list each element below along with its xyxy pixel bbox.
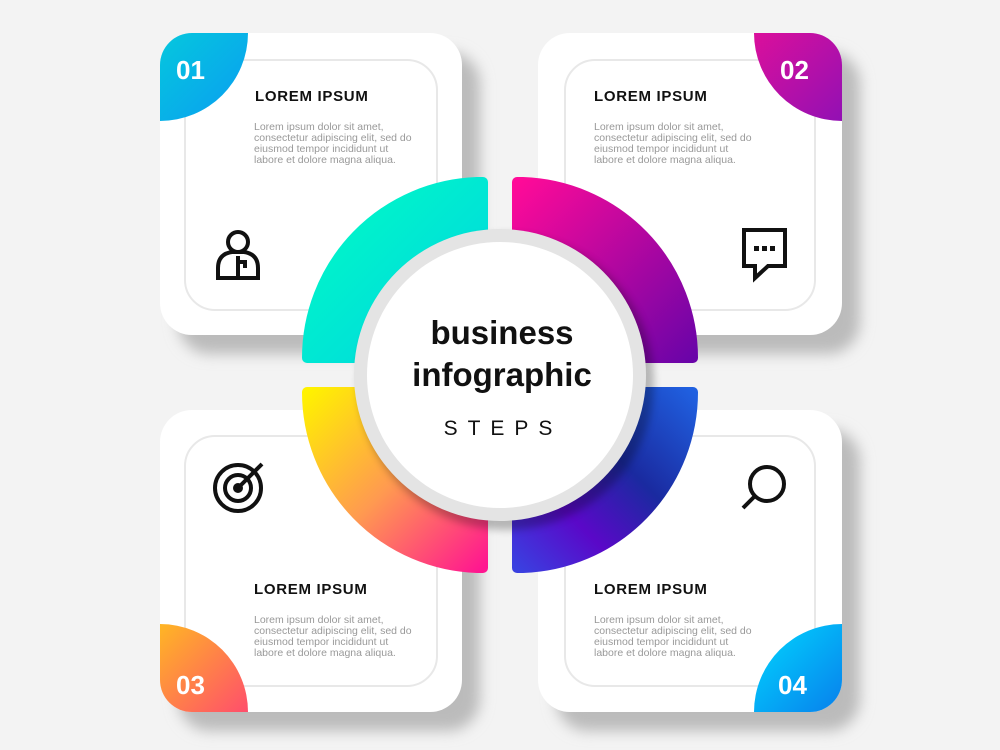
heading 04: LOREM IPSUM — [594, 581, 708, 598]
subtitle: STEPS — [444, 417, 562, 440]
heading 03: LOREM IPSUM — [254, 581, 368, 598]
body 03: consectetur adipiscing elit, sed do — [254, 625, 412, 637]
body 04: consectetur adipiscing elit, sed do — [594, 625, 752, 637]
body 04: labore et dolore magna aliqua. — [594, 647, 736, 659]
badge 02: 02 — [780, 55, 809, 85]
card 01 — [160, 33, 487, 361]
body 01: eiusmod tempor incididunt ut — [254, 143, 388, 155]
badge 01: 01 — [176, 55, 205, 85]
body 03: eiusmod tempor incididunt ut — [254, 636, 388, 648]
body 02: eiusmod tempor incididunt ut — [594, 143, 728, 155]
center circle: infographic — [412, 356, 592, 393]
icon: person — [218, 232, 258, 278]
card 02 — [538, 33, 867, 361]
badge 01 — [160, 33, 248, 121]
body 03: labore et dolore magna aliqua. — [254, 647, 396, 659]
body 04: eiusmod tempor incididunt ut — [594, 636, 728, 648]
center circle — [354, 229, 654, 530]
ring segments — [307, 182, 693, 568]
body 02: consectetur adipiscing elit, sed do — [594, 132, 752, 144]
card 04 — [538, 410, 867, 738]
badge 02 — [754, 33, 842, 121]
icon: magnifier — [743, 467, 784, 508]
icon: chat — [744, 230, 785, 278]
title: business — [430, 314, 574, 351]
heading 02: LOREM IPSUM — [594, 88, 708, 105]
body 02: Lorem ipsum dolor sit amet, — [594, 121, 724, 133]
badge 03: 03 — [176, 670, 205, 700]
card 03 — [160, 410, 487, 738]
icon: target — [215, 464, 262, 511]
heading 01: LOREM IPSUM — [255, 88, 369, 105]
body 04: Lorem ipsum dolor sit amet, — [594, 614, 724, 626]
body 02: labore et dolore magna aliqua. — [594, 154, 736, 166]
badge 03 — [160, 624, 248, 712]
body 01: Lorem ipsum dolor sit amet, — [254, 121, 384, 133]
badge 04 — [754, 624, 842, 712]
body 03: Lorem ipsum dolor sit amet, — [254, 614, 384, 626]
body 01: labore et dolore magna aliqua. — [254, 154, 396, 166]
badge 04: 04 — [778, 670, 807, 700]
body 01: consectetur adipiscing elit, sed do — [254, 132, 412, 144]
